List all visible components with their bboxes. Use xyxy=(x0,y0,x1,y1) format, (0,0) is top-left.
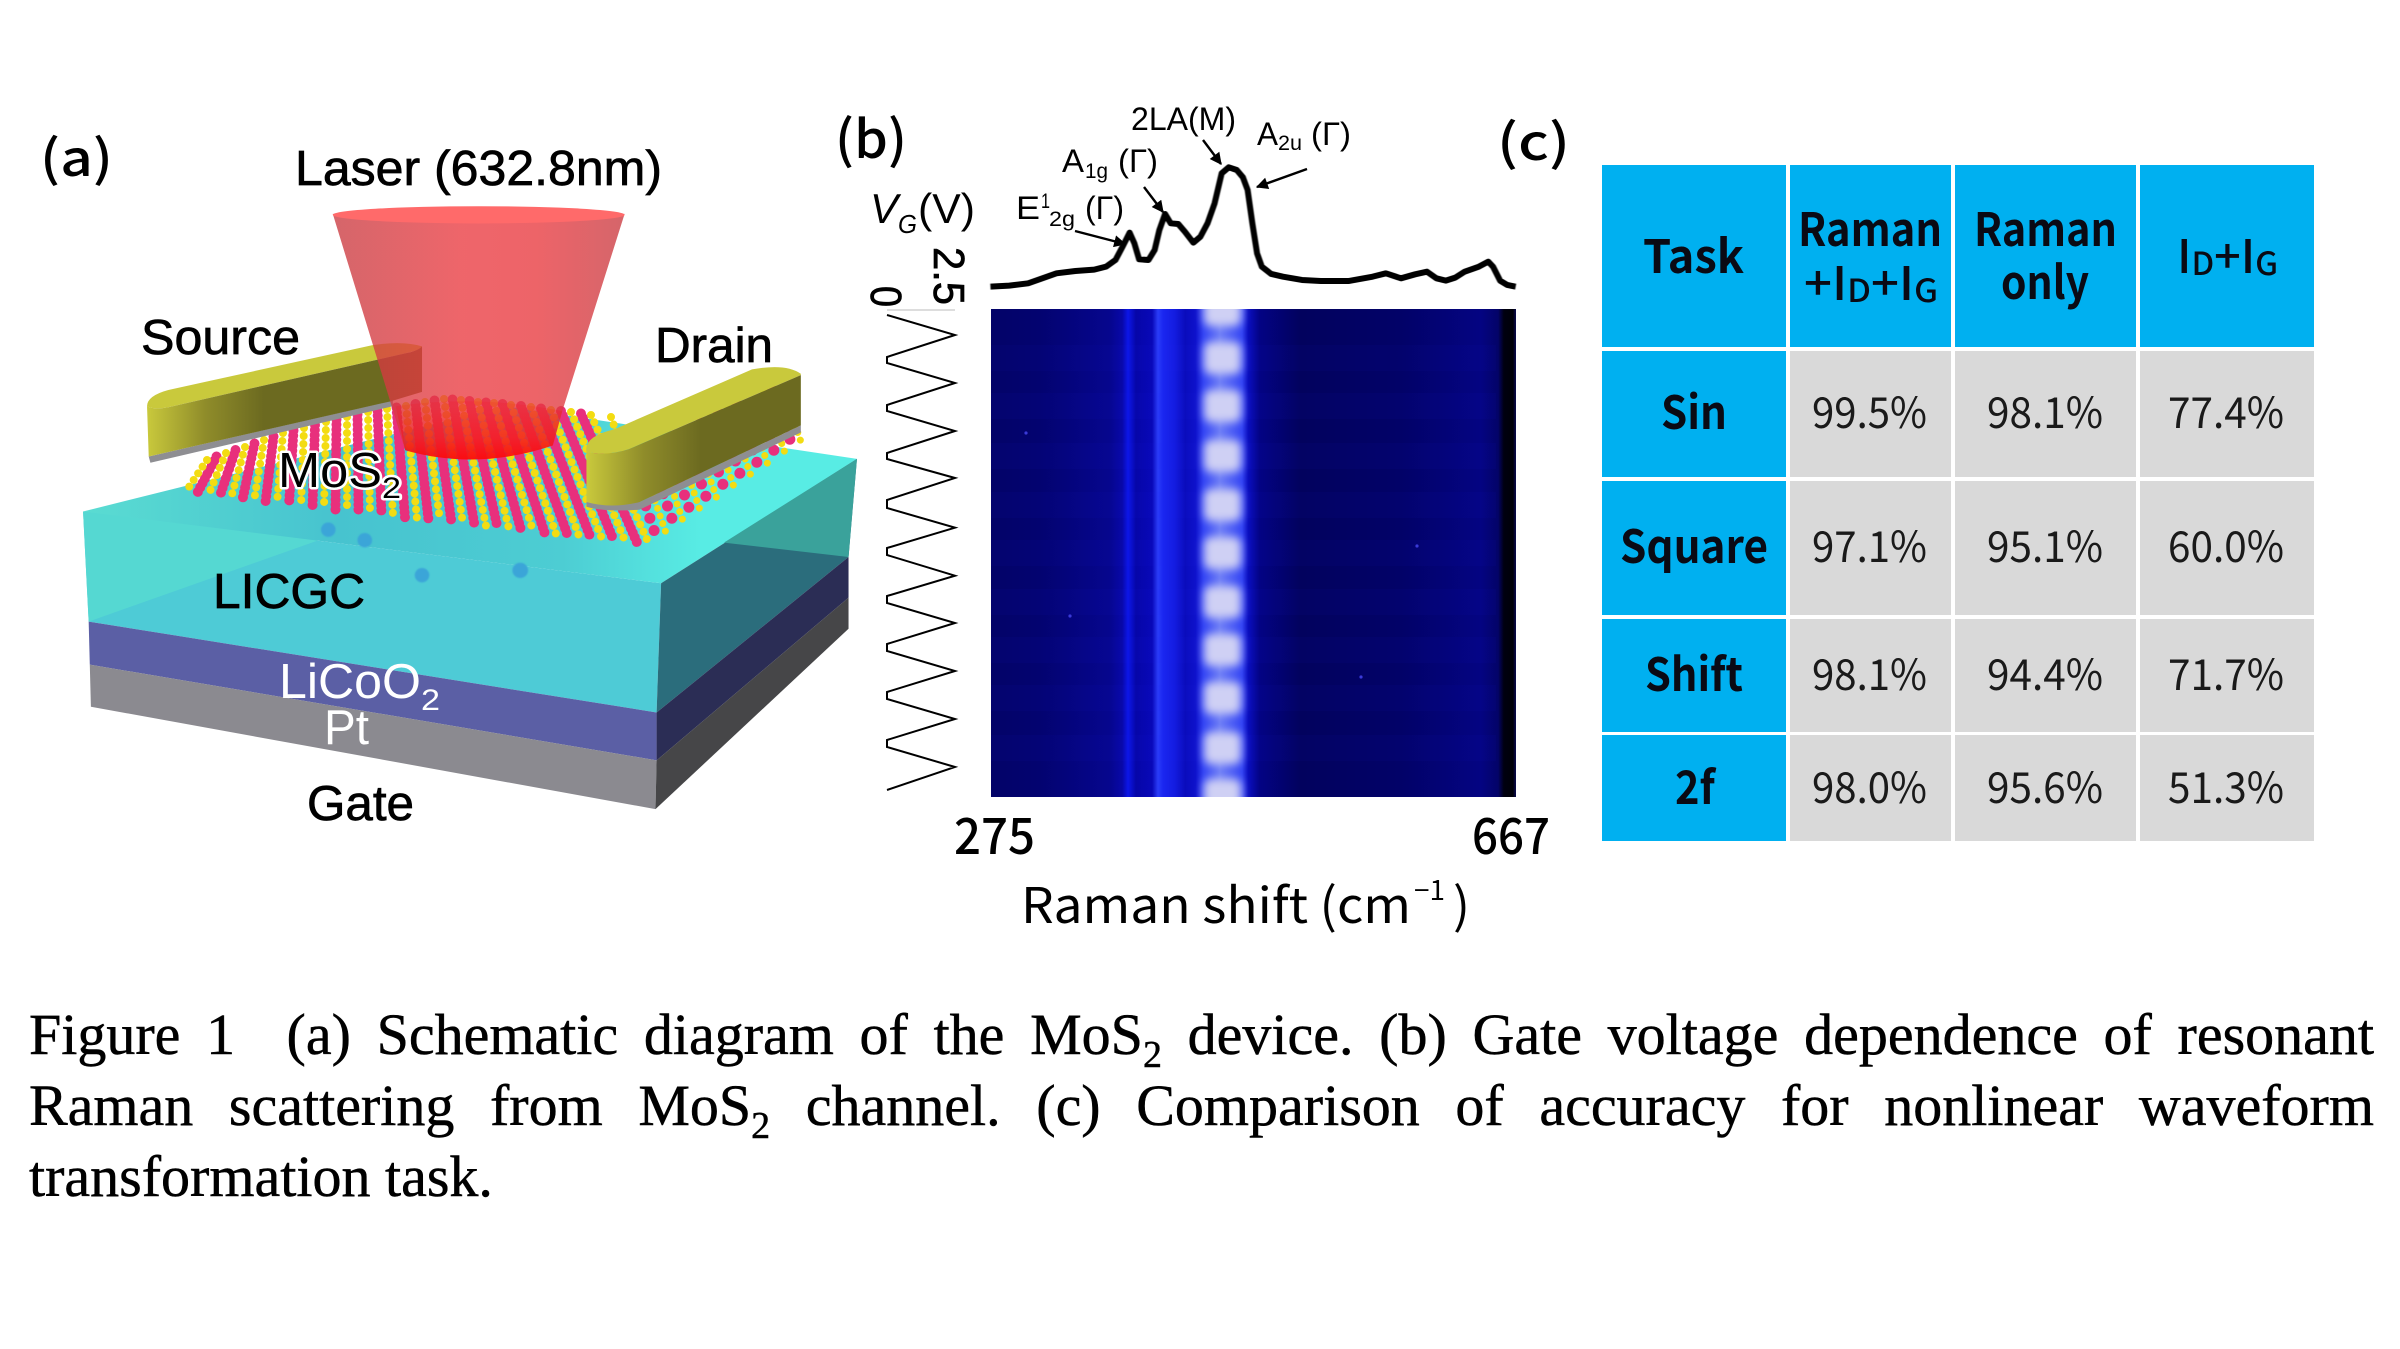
table header row: Task xyxy=(1643,221,1744,287)
table row: Shift: 71.7% xyxy=(2168,641,2284,703)
table row: Square: 95.1% xyxy=(1987,513,2103,575)
panel: Raman map (b) xyxy=(835,98,1550,938)
axis tick: 0: 0 xyxy=(861,286,910,307)
label: source: Source xyxy=(141,311,300,365)
label: LiCoO2: 2 xyxy=(421,684,440,717)
panel: accuracy table (c) xyxy=(1497,103,2314,841)
table row: Square: Square xyxy=(1620,511,1768,577)
label: laser: Laser (632.8nm) xyxy=(295,142,662,196)
table header row: I xyxy=(2177,221,2191,287)
table row: Shift: 98.1% xyxy=(1812,641,1927,703)
table row: Sin: Sin xyxy=(1661,377,1727,443)
label: Gate: Gate xyxy=(307,777,414,831)
axis title: VG(V) xyxy=(870,185,975,239)
table header row: D xyxy=(1847,266,1871,312)
table row: Sin: 99.5% xyxy=(1812,379,1927,441)
figure caption: Figure 1 (a) Schematic diagram of the MoS2 device. (b) Gate voltage dependence of resonant xyxy=(29,1002,2374,1076)
x axis title: ) xyxy=(1453,867,1470,938)
x axis title: −1 xyxy=(1414,869,1445,908)
table row: Square: 97.1% xyxy=(1812,513,1927,575)
gate voltage triangle waveform xyxy=(887,310,955,790)
laser beam cone xyxy=(333,206,625,459)
table row: 2f: 51.3% xyxy=(2168,754,2284,816)
table row: 2f: 95.6% xyxy=(1987,754,2103,816)
peak label: E1 2g: 1 xyxy=(1041,190,1050,213)
peak label: A1g xyxy=(1062,143,1158,183)
table row: 2f xyxy=(1602,735,2314,841)
table row: Shift: 94.4% xyxy=(1987,641,2103,703)
peak label: 2LA(M): 2LA(M) xyxy=(1131,101,1236,137)
peak label: E1 2g xyxy=(1016,190,1124,231)
table header row: +I xyxy=(1804,248,1844,314)
figure caption xyxy=(29,1002,2374,1209)
peak label arrows xyxy=(1075,140,1307,244)
electrode: source xyxy=(147,343,422,463)
peak label: E1 2g: 2g xyxy=(1049,208,1075,231)
table header row xyxy=(1602,165,2314,347)
peak label: A2u: 2u xyxy=(1278,132,1302,155)
peak label: E1 2g: (Γ) xyxy=(1085,190,1124,226)
label: drain: Drain xyxy=(655,319,773,373)
label: LiCoO2: LiCoO xyxy=(279,655,421,709)
label: (c): (c) xyxy=(1497,103,1570,175)
table row: Square: 60.0% xyxy=(2168,513,2284,575)
axis title: VG(V): G xyxy=(898,209,917,239)
peak label: A1g: (Γ) xyxy=(1118,143,1158,179)
table row: Square xyxy=(1602,481,2314,615)
table header row: Raman xyxy=(1798,194,1942,260)
label: LICGC: LICGC xyxy=(213,565,365,619)
table header row: only xyxy=(2001,247,2089,313)
table header row: +I xyxy=(1871,248,1914,314)
label: MoS2: 2 xyxy=(382,472,401,505)
table header row: D xyxy=(2191,239,2214,285)
peak label: A2u xyxy=(1257,116,1351,155)
table row: Sin xyxy=(1602,351,2314,477)
layered substrate block xyxy=(83,406,857,809)
table header row: G xyxy=(1914,266,1938,312)
axis tick: 2.5: 2.5 xyxy=(924,247,973,305)
x tick: 667: 667 xyxy=(1472,797,1550,869)
table row: Shift xyxy=(1602,619,2314,732)
peak label: A1g: 1g xyxy=(1085,160,1108,183)
axis title: VG(V): (V) xyxy=(918,185,975,232)
panel: device schematic (a) xyxy=(40,119,857,831)
table row: 2f: 98.0% xyxy=(1812,754,1927,816)
table row: Shift: Shift xyxy=(1645,639,1743,705)
table header row: G xyxy=(2255,239,2278,285)
figure caption: Raman scattering from MoS2 channel. (c) Comparison of accuracy for nonlinear waveform xyxy=(29,1073,2374,1147)
table row: Sin: 77.4% xyxy=(2168,379,2284,441)
electrode: drain xyxy=(586,367,801,511)
Raman intensity heat map xyxy=(991,296,1516,811)
table header row: +I xyxy=(2214,221,2255,287)
table header row: Raman xyxy=(1974,194,2117,260)
peak label: A2u: A xyxy=(1257,116,1279,152)
x axis title: Raman shift (cm xyxy=(1021,867,1411,938)
MoS2 atomic lattice xyxy=(185,372,801,544)
label: (b): (b) xyxy=(835,98,907,173)
label: MoS2: MoS xyxy=(278,444,382,498)
Raman spectrum curve xyxy=(990,167,1516,287)
axis title: VG(V): V xyxy=(870,185,902,232)
label: Pt: Pt xyxy=(324,701,369,755)
x tick: 275: 275 xyxy=(954,797,1035,869)
peak label: A1g: A xyxy=(1062,143,1085,179)
figure caption: transformation task. xyxy=(29,1144,493,1209)
table row: 2f: 2f xyxy=(1675,752,1717,818)
peak label: A2u: (Γ) xyxy=(1311,116,1351,152)
table row: Sin: 98.1% xyxy=(1987,379,2103,441)
peak label: E1 2g: E xyxy=(1016,190,1040,226)
label: (a): (a) xyxy=(40,119,113,191)
